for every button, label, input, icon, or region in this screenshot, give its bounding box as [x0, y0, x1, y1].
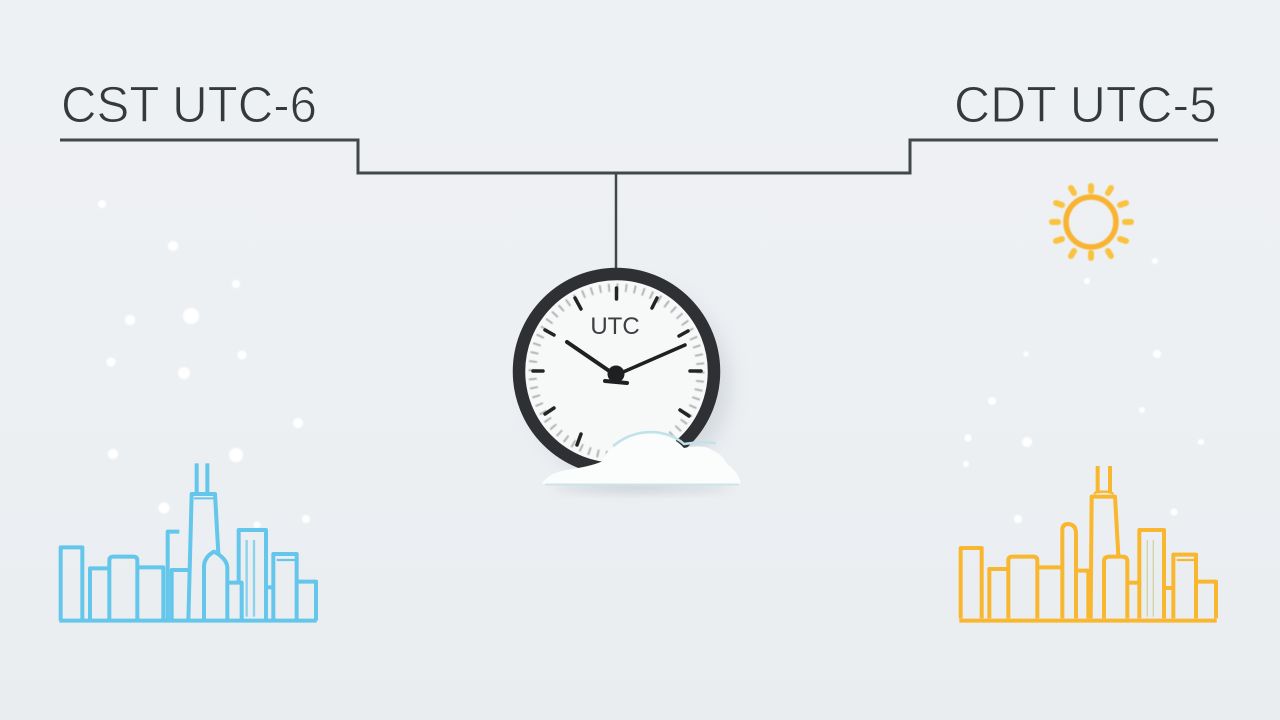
minute ticks [532, 288, 700, 456]
clock face [519, 274, 714, 469]
hour ticks [533, 288, 701, 445]
snow dots: right side [963, 258, 1204, 523]
skyline: blue, winter [59, 463, 317, 621]
heading: CDT UTC-5: CDT UTC-5 [954, 76, 1217, 133]
skyline: orange, summer [959, 466, 1217, 621]
snow dots: left side [98, 200, 310, 528]
clock [519, 274, 730, 485]
heading: CST UTC-6: CST UTC-6 [61, 76, 317, 133]
clock label: UTC: UTC [590, 313, 640, 340]
clock hands [567, 342, 685, 383]
cloud [543, 432, 740, 493]
icon: sun [1052, 186, 1131, 258]
connector lines from time zones to clock [60, 140, 1218, 270]
